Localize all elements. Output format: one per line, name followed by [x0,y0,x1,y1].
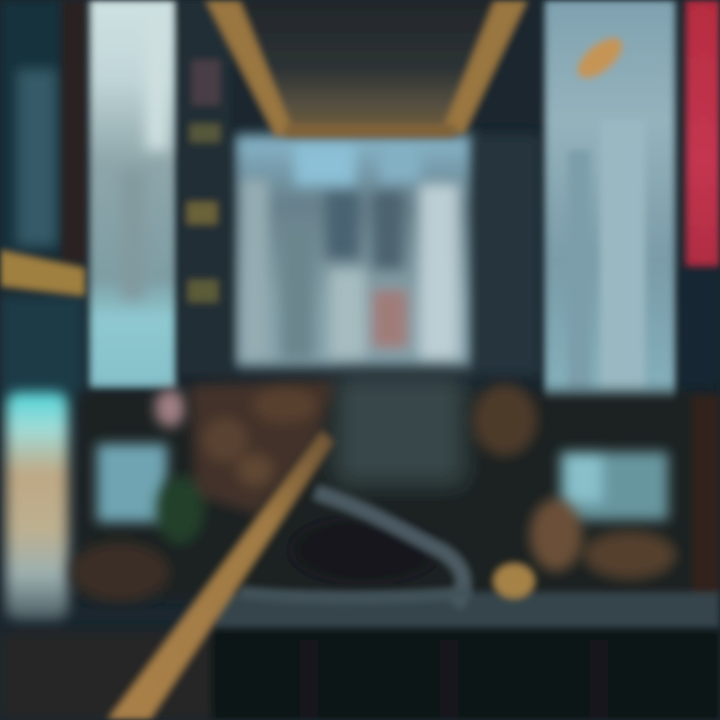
panel: brown wall lower right [692,395,720,600]
panel: dark tower with gold dabs [181,0,231,375]
panel: bottom left floor [0,632,215,720]
panel: glowing left pillar [6,392,68,620]
panel: lower left glass [97,444,167,522]
panel: left pale tower [90,0,175,388]
plants and furniture: left browns [70,380,335,602]
panel: bottom dark strip [212,630,720,720]
panel: dark right tower [475,135,540,375]
panel: lower centre lobby [335,375,465,485]
panel: lower dark band [80,392,720,597]
wooden beam: right [442,0,528,135]
gold horizontal band [0,250,85,296]
wooden beam: ceiling cross [285,124,455,138]
panel: red banner [686,0,720,266]
panel: floor [215,592,720,628]
orange dab on floor [493,563,535,599]
panel: dark pool [293,520,437,580]
wooden beam: left [205,0,294,138]
panel: right pale tower [545,0,675,400]
plants and furniture: centre right browns [473,384,676,579]
panel: dark left column [0,0,85,395]
wooden diagonal beam [107,430,334,720]
curving walkway [315,492,463,605]
panel: ceiling [222,0,512,135]
icon: orange dab on right tower [571,31,629,85]
panel: dark right wall [680,272,720,402]
panel: lower right glass [560,452,668,520]
walkway base [240,592,470,598]
panel: centre atrium [235,135,473,367]
panel: brown post [62,0,86,262]
pink flower [155,389,185,427]
